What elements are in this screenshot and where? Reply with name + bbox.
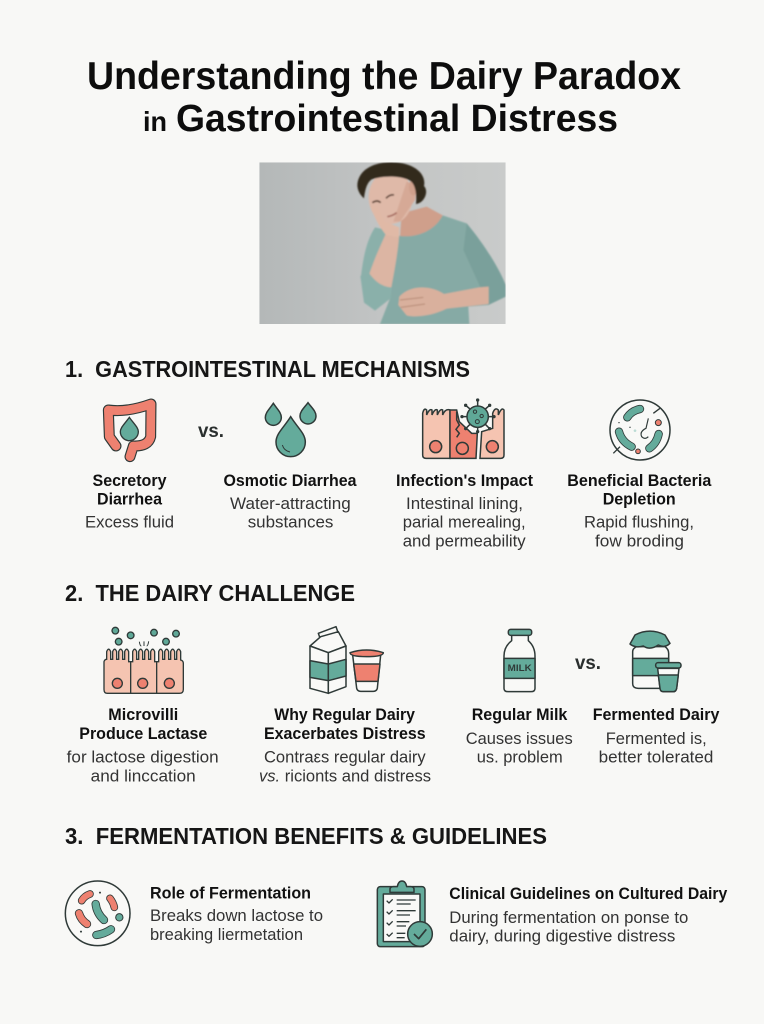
text: microvilli produce lactase: and linccation — [91, 767, 196, 786]
text: infection's impact: Intestinal lining, — [406, 494, 523, 513]
face — [369, 171, 413, 224]
text: clinical guidelines: Clinical Guidelines on Cultured Dairy — [449, 885, 728, 903]
text: osmotic diarrhea: Water-attracting — [230, 494, 351, 513]
icon: microvilli cells — [104, 627, 183, 693]
text: clinical guidelines — [449, 885, 728, 946]
neck — [400, 207, 443, 237]
text: role of fermentation: Role of Fermentation — [150, 884, 311, 902]
text: beneficial bacteria depletion — [567, 472, 712, 551]
hand on stomach — [398, 287, 489, 316]
forearm — [369, 233, 399, 288]
section 3 heading: 3. FERMENTATION BENEFITS & GUIDELINES — [65, 823, 547, 849]
text: microvilli produce lactase — [67, 706, 219, 786]
icon: milk bottle: MILK — [508, 663, 532, 673]
torso and far arm — [380, 215, 488, 324]
text: microvilli produce lactase: for lactose digestion — [67, 748, 219, 767]
text: beneficial bacteria depletion: Beneficial Bacteria — [567, 472, 712, 490]
hand on cheek — [374, 216, 400, 237]
text: osmotic diarrhea: Osmotic Diarrhea — [224, 472, 357, 490]
lower sleeve — [360, 273, 392, 311]
upper sleeve — [361, 227, 387, 276]
icon: colon with drop — [108, 404, 151, 457]
text: infection's impact — [396, 472, 533, 551]
text: secretory diarrhea: Secretory — [92, 472, 167, 490]
text: microvilli produce lactase: Microvilli — [108, 706, 178, 724]
text: beneficial bacteria depletion: Depletion — [603, 491, 676, 509]
text: beneficial bacteria depletion: fow broding — [595, 532, 684, 551]
icon: damaged intestinal lining with virus — [423, 398, 504, 458]
text: regular milk: us. problem — [477, 748, 563, 767]
text: fermented dairy: better tolerated — [599, 748, 713, 767]
text: why regular dairy exacerbates distress — [259, 706, 431, 786]
text: secretory diarrhea: Excess fluid — [85, 513, 174, 532]
text: infection's impact: parial merealing, — [403, 513, 526, 532]
title: in — [143, 106, 167, 137]
icon: water drops — [265, 403, 316, 457]
title: Understanding the Dairy Paradox — [87, 55, 681, 98]
text: secretory diarrhea: Diarrhea — [97, 491, 163, 509]
icon: fermentation microbes — [65, 881, 130, 946]
section 2 heading: 2. THE DAIRY CHALLENGE — [65, 580, 355, 606]
icon: milk carton and cup — [310, 627, 383, 693]
text: osmotic diarrhea — [224, 472, 357, 532]
text: why regular dairy exacerbates distress: Why Regular Dairy — [274, 706, 416, 724]
vs label: vs. — [198, 421, 224, 442]
text: secretory diarrhea — [85, 472, 174, 532]
section 1 heading: 1. GASTROINTESTINAL MECHANISMS — [65, 356, 470, 382]
title — [87, 55, 681, 140]
hair — [357, 162, 426, 204]
text: why regular dairy exacerbates distress: Exacerbates Distress — [264, 725, 426, 743]
text: fermented dairy — [593, 706, 720, 767]
text: fermented dairy: Fermented Dairy — [593, 706, 720, 724]
text: beneficial bacteria depletion: Rapid flushing, — [584, 513, 694, 532]
text: infection's impact: Infection's Impact — [396, 472, 533, 490]
icon: milk bottle — [504, 629, 535, 692]
text: microvilli produce lactase: Produce Lactase — [79, 725, 207, 743]
text: regular milk — [466, 706, 573, 767]
vs label: vs. — [575, 653, 601, 674]
text: role of fermentation — [150, 884, 323, 944]
text: regular milk: Regular Milk — [472, 706, 568, 724]
text: clinical guidelines: During fermentation on ponse to — [449, 908, 688, 927]
text: role of fermentation: Breaks down lactose to — [150, 906, 323, 925]
text: why regular dairy exacerbates distress: Contraεs regular dairy — [264, 748, 426, 767]
text: role of fermentation: breaking liermetation — [150, 925, 303, 944]
text: why regular dairy exacerbates distress: vs. ricionts and distress — [259, 767, 431, 786]
title: Gastrointestinal Distress — [176, 98, 618, 140]
text: clinical guidelines: dairy, during digestive distress — [449, 927, 675, 946]
text: osmotic diarrhea: substances — [248, 513, 333, 532]
icon: fermented dairy jar and cup — [630, 631, 681, 692]
icon: bacteria petri dish — [610, 400, 670, 460]
text: regular milk: Causes issues — [466, 729, 573, 748]
text: infection's impact: and permeability — [403, 532, 526, 551]
text: fermented dairy: Fermented is, — [606, 729, 707, 748]
photo: woman holding her stomach and cheek — [259, 162, 506, 324]
icon: clipboard checklist — [377, 881, 432, 947]
